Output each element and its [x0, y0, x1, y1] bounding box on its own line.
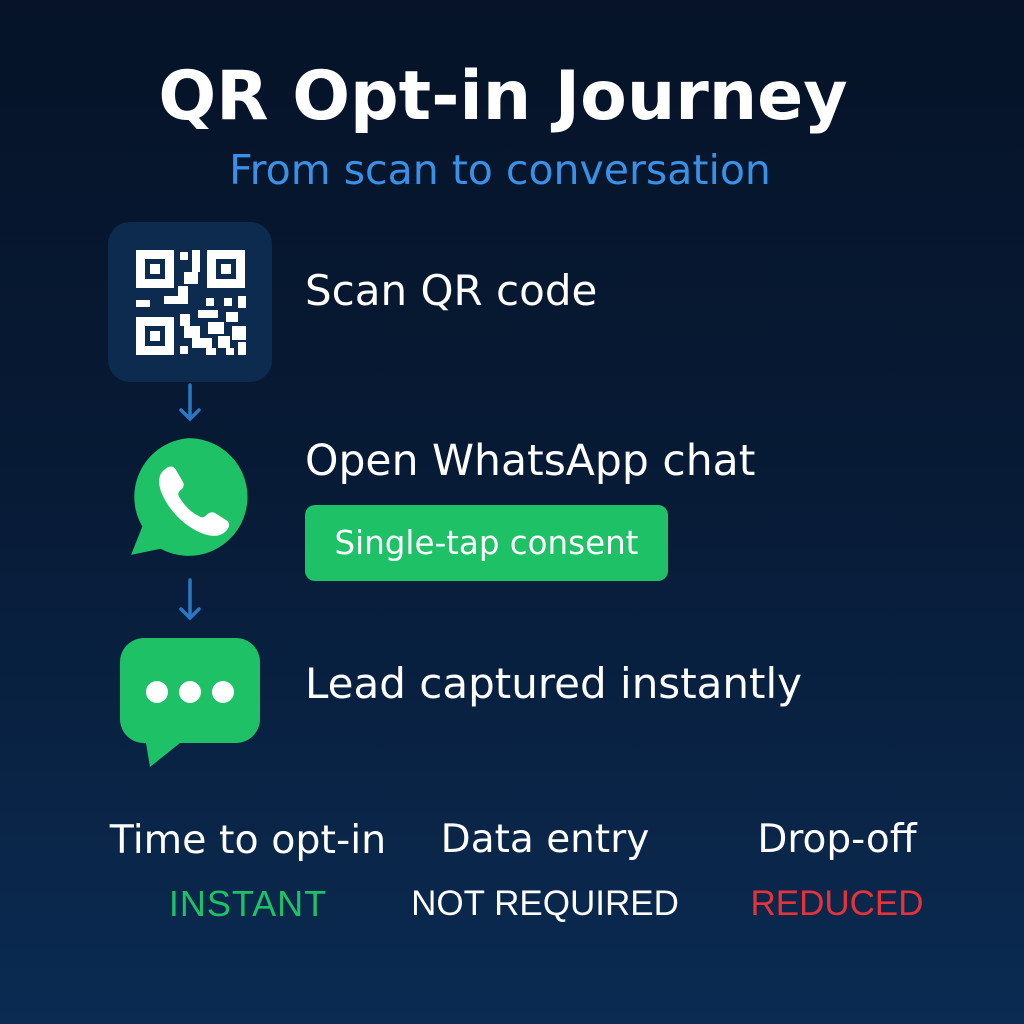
stat: time to opt-in	[110, 817, 386, 924]
badge: single-tap consent: Single-tap consent	[335, 524, 638, 562]
title: QR Opt-in Journey	[158, 57, 848, 136]
subtitle: From scan to conversation	[229, 146, 771, 194]
arrow 2	[179, 578, 201, 620]
stat: drop-off: REDUCED	[750, 884, 924, 923]
icon: QR code	[108, 222, 272, 382]
stat: data entry: NOT REQUIRED	[411, 884, 679, 923]
step 2 text: Open WhatsApp chat	[305, 437, 755, 486]
step 1 text: Scan QR code	[305, 266, 597, 315]
icon: WhatsApp	[131, 438, 248, 556]
stat: drop-off: Drop-off	[757, 817, 917, 862]
arrow 1	[179, 383, 201, 422]
stat: drop-off	[750, 817, 924, 923]
stat: data entry	[411, 817, 679, 923]
stat: time to opt-in: INSTANT	[169, 883, 327, 924]
icon: chat bubble	[120, 638, 260, 767]
stat: data entry: Data entry	[441, 817, 649, 862]
stat: time to opt-in: Time to opt-in	[110, 817, 386, 863]
step 3 text: Lead captured instantly	[305, 659, 802, 708]
badge: single-tap consent	[305, 505, 668, 581]
